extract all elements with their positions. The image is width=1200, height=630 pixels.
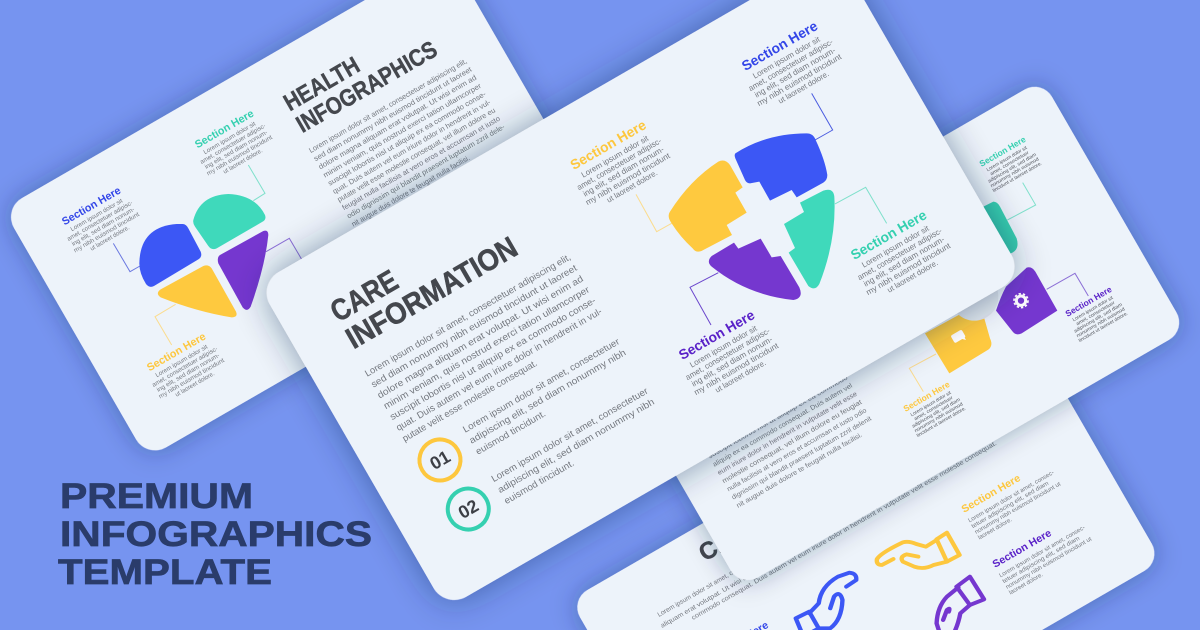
section: purple small: tincidunt ut laoreet dolore. [1078, 311, 1129, 344]
section: yellow small: adipiscing elit, sed diam [911, 397, 961, 430]
title: premium infographics template: INFOGRAPHICS [60, 515, 372, 554]
body text: health: quat. Duis autem vel eum iriure dolor in hendrerit in vul- [331, 97, 493, 196]
body text: health: feugiat nulla facilisis at vero eros et accumsan et iusto [340, 114, 502, 212]
icon: message [951, 329, 967, 346]
badge: 02 [440, 481, 496, 537]
text: item 02: euismod tincidunt. [502, 457, 576, 506]
body text: right slide: nulla facilisis at vero eros et accumsan et iusto odio [726, 407, 868, 493]
section: purple hand: tetuer adipiscing elit, sed diam [1002, 536, 1081, 585]
text: item 02: adipiscing elit, sed diam nonummy nibh [496, 396, 656, 495]
heart chart [113, 165, 302, 345]
section: teal: my nibh euismod tincidunt [206, 134, 274, 177]
heading: care information: CARE [325, 264, 404, 329]
section: purple small: amet, consectetuer [1075, 300, 1116, 327]
section: blue shield: my nibh euismod tincidunt [756, 52, 844, 108]
piece: yellow [925, 303, 991, 373]
section: yellow [141, 328, 229, 406]
badge: 01: 01 [426, 446, 454, 474]
body text: care [363, 251, 610, 444]
section: teal: ut laoreet dolore. [222, 147, 264, 176]
section: teal shield: amet, consectetuer adipisc- [856, 226, 944, 282]
body text: right slide: suscipit lobortis nisl ut aliquip ex ea commodo [707, 374, 849, 460]
section: purple hand: Section Here [990, 527, 1054, 571]
section: yellow: Lorem ipsum dolor sit [154, 343, 209, 379]
body text: hands: commodo consequat. Duis autem vel eum iriure dolor in hendrerit in vulputate velit esse molestie consequat. [690, 440, 998, 622]
section: blue shield: ing elit, sed diam nonum- [753, 46, 837, 100]
panel: bottom hands slide [570, 334, 1162, 630]
icon: yellow hand [877, 533, 960, 568]
shield: blue piece [735, 133, 827, 201]
shield chart [636, 93, 887, 325]
section: purple hand [990, 511, 1097, 596]
body text: care: suscipit lobortis nisl ut aliquip ex ea commodo conse- [388, 294, 597, 422]
text: item 01: euismod tincidunt. [473, 408, 547, 457]
body text: care: putate velit esse molestie consequat. [400, 357, 539, 444]
section: purple hand: laoreet dolore. [1008, 572, 1045, 596]
section: teal small: amet, consectetuer [989, 150, 1030, 177]
section: blue shield: Lorem ipsum dolor sit [751, 34, 822, 81]
section: purple small: adipiscing elit, sed diam [1073, 302, 1123, 335]
section: yellow small: Section Here [902, 379, 952, 414]
body text: care: quat. Duis autem vel eum iriure dolor in hendrerit in vul- [394, 305, 604, 433]
panel: care information slide [258, 0, 1023, 609]
panel: right slide with icons [596, 80, 1187, 587]
section: yellow hand: Lorem ipsum dolor sit amet, consec- [968, 470, 1055, 524]
section: teal small: Lorem ipsum dolor sit [986, 145, 1029, 173]
section: blue shield: amet, consectetuer adipisc- [747, 37, 835, 93]
section: blue: ing elit, sed diam nonum- [71, 206, 136, 248]
section: yellow: Section Here [145, 331, 208, 374]
section: yellow: amet, consectetuer adipisc- [151, 345, 219, 389]
body text: health [307, 56, 512, 229]
section: teal shield: my nibh euismod tincidunt [865, 241, 953, 297]
body text: health: putate velit esse molestie consequat, vel illum dolore eu [336, 106, 497, 204]
heading: care information: INFORMATION [341, 231, 523, 356]
section: yellow small: Lorem ipsum dolor sit [910, 390, 953, 418]
card: care [258, 0, 1023, 609]
section: blue: Lorem ipsum dolor sit [69, 197, 124, 233]
heart: teal piece [193, 194, 265, 249]
section: yellow hand: laoreet dolore. [977, 517, 1014, 541]
section: yellow shield: my nibh euismod tincidunt [584, 151, 672, 207]
section: blue shield: ut laoreet dolore. [777, 69, 831, 106]
section: purple shield: amet, consectetuer adipisc- [684, 326, 772, 382]
text: item 01: adipiscing elit, sed diam nonummy nibh [467, 347, 628, 446]
body text: health: nit augue duis dolore te feugait nulla facilisi. [350, 153, 471, 229]
section: purple hand: nonummy nibh euismod tincidunt ut [1005, 536, 1093, 591]
body text: care: dolore magna aliquam erat volutpat. Ut wisi enim ad [375, 273, 585, 400]
section: yellow shield: amet, consectetuer adipisc- [575, 136, 663, 192]
body text: health: odio dignissim qui blandit praesent luptatum zzril dele- [345, 122, 507, 220]
card: health [3, 0, 591, 458]
section: yellow: ing elit, sed diam nonum- [156, 352, 221, 394]
body text: health: dolore magna aliquam erat volutpat. Ut wisi enim ad [317, 73, 478, 171]
section: teal: amet, consectetuer adipisc- [199, 122, 267, 166]
section: teal shield: Lorem ipsum dolor sit [860, 223, 931, 270]
heart: blue piece [139, 224, 201, 287]
section: purple shield: Lorem ipsum dolor sit [688, 323, 759, 370]
card: hands [570, 334, 1162, 630]
left column: care [323, 183, 665, 538]
section: teal: Section Here [193, 108, 256, 151]
piece: teal [973, 202, 1018, 263]
section: yellow: ut laoreet dolore. [174, 370, 216, 399]
section: teal shield: Section Here [848, 206, 929, 263]
section: teal: Lorem ipsum dolor sit [202, 120, 257, 156]
icon: gear [1014, 294, 1028, 308]
section: blue: amet, consectetuer adipisc- [66, 199, 134, 243]
section: yellow shield: Lorem ipsum dolor sit [580, 133, 651, 180]
piece: purple [996, 267, 1057, 334]
section: yellow hand: nonummy nibh euismod tincidunt ut [974, 481, 1062, 536]
badge: 01 [412, 432, 468, 488]
icon: purple hand [937, 577, 984, 630]
section: purple small [1062, 283, 1129, 344]
body text: care: sed diam nonummy nibh euismod tincidunt ut laoreet [369, 262, 579, 389]
title and body: health [277, 4, 512, 229]
panel: health infographics slide [3, 0, 591, 458]
section: teal [189, 105, 277, 183]
section: yellow small: nonummy nibh euismod [914, 401, 964, 434]
body text: right slide: molestie consequat, vel illum dolore eu feugiat [721, 399, 863, 485]
shield: yellow piece [669, 161, 747, 252]
section: purple shield: Section Here [676, 306, 757, 363]
section: teal small: adipiscing elit, sed diam [987, 152, 1037, 185]
connector lines [909, 183, 1088, 392]
section: yellow small: amet, consectetuer [913, 395, 954, 422]
body text: right slide: dignissim qui blandit praesent luptatum zzril delenit [731, 415, 873, 502]
title: premium infographics template: PREMIUM [60, 477, 253, 516]
title: premium infographics template [58, 477, 372, 592]
section: yellow small [900, 378, 967, 439]
section: purple small: Lorem ipsum dolor sit [1072, 295, 1115, 323]
heart: yellow piece [158, 265, 237, 317]
center circle [950, 273, 998, 321]
section: yellow shield: Section Here [567, 116, 649, 173]
section: blue: ut laoreet dolore. [89, 224, 131, 253]
section: purple shield [671, 303, 785, 404]
card: right [596, 80, 1187, 587]
section: purple shield: ut laoreet dolore. [714, 358, 768, 395]
title: premium infographics template: TEMPLATE [58, 553, 272, 592]
section: yellow hand: Section Here [960, 472, 1023, 516]
connector lines [113, 165, 302, 345]
section: blue: my nibh euismod tincidunt [73, 211, 141, 254]
connector lines [636, 93, 887, 325]
text: item 02: Lorem ipsum dolor sit amet, consectetuer [489, 385, 650, 484]
heading: health infographics: HEALTH [279, 52, 365, 117]
icon diagram [909, 183, 1088, 392]
section: blue [56, 182, 144, 260]
body text: health: sed diam nonummy nibh euismod tincidunt ut laoreet [312, 65, 473, 163]
section: teal shield: ing elit, sed diam nonum- [862, 235, 946, 289]
body text: health: suscipit lobortis nisl ut aliquip ex ea commodo conse- [326, 89, 488, 188]
heart: purple piece [218, 231, 268, 310]
section: purple small: nonummy nibh euismod [1076, 306, 1126, 339]
section: teal small: Section Here [978, 134, 1028, 169]
section: yellow shield [562, 113, 677, 214]
body text: right slide: eum iriure dolor in hendrerit in vulputate velit esse [716, 391, 859, 477]
section: teal small: nonummy nibh euismod [990, 156, 1040, 189]
section: purple small: Section Here [1064, 284, 1114, 319]
body text: health: Lorem ipsum dolor sit amet, consectetuer adipiscing elit, [307, 57, 469, 155]
section: teal shield [843, 203, 957, 304]
section: yellow: my nibh euismod tincidunt [158, 357, 226, 400]
heading fragment: CARE [694, 510, 767, 567]
icon: blue hand [796, 573, 856, 630]
section: yellow small: tincidunt ut laoreet dolore. [916, 406, 967, 439]
body text: hands: aliquam erat volutpat. Ut wisi enim ad [660, 563, 767, 630]
section: blue: Section Here [60, 185, 123, 228]
section: yellow shield: ing elit, sed diam nonum- [581, 145, 666, 199]
section: blue shield [734, 14, 848, 115]
section: teal shield: ut laoreet dolore. [886, 258, 940, 295]
heading: health infographics: INFOGRAPHICS [292, 36, 442, 138]
text: item 01: Lorem ipsum dolor sit amet, consectetuer [461, 336, 621, 435]
section: purple shield: ing elit, sed diam nonum- [690, 335, 774, 389]
section: yellow hand: tetuer adipiscing elit, sed diam [971, 481, 1050, 530]
body text: care: minim veniam, quis nostrud exerci tation ullamcorper [381, 284, 591, 411]
section: blue shield: Section Here [739, 17, 820, 74]
section: purple hand: Lorem ipsum dolor sit amet, consec- [998, 525, 1086, 579]
section: purple shield: my nibh euismod tincidunt [693, 341, 781, 397]
section: teal: ing elit, sed diam nonum- [204, 129, 269, 171]
body text: right slide: aliquip ex ea commodo consequat. Duis autem vel [712, 382, 854, 469]
body text: care: Lorem ipsum dolor sit amet, consectetuer adipiscing elit, [363, 251, 572, 379]
section: teal small: tincidunt ut laoreet dolore. [992, 161, 1043, 194]
body text: health: minim veniam, quis nostrud exerci tation ullamcorper [321, 81, 483, 179]
section: yellow hand [960, 456, 1066, 541]
body text: right slide [707, 374, 878, 510]
badge: 02: 02 [455, 496, 482, 523]
body text: hands: Lorem ipsum dolor sit amet, consectetuer [656, 552, 765, 619]
section: yellow shield: ut laoreet dolore. [605, 168, 659, 205]
shield: purple piece [709, 239, 801, 300]
body text: right slide: nit augue duis dolore te feugait nulla facilisi. [736, 432, 864, 510]
hand icons [796, 533, 984, 630]
shield: teal piece [784, 190, 835, 288]
section: teal small [976, 133, 1043, 194]
